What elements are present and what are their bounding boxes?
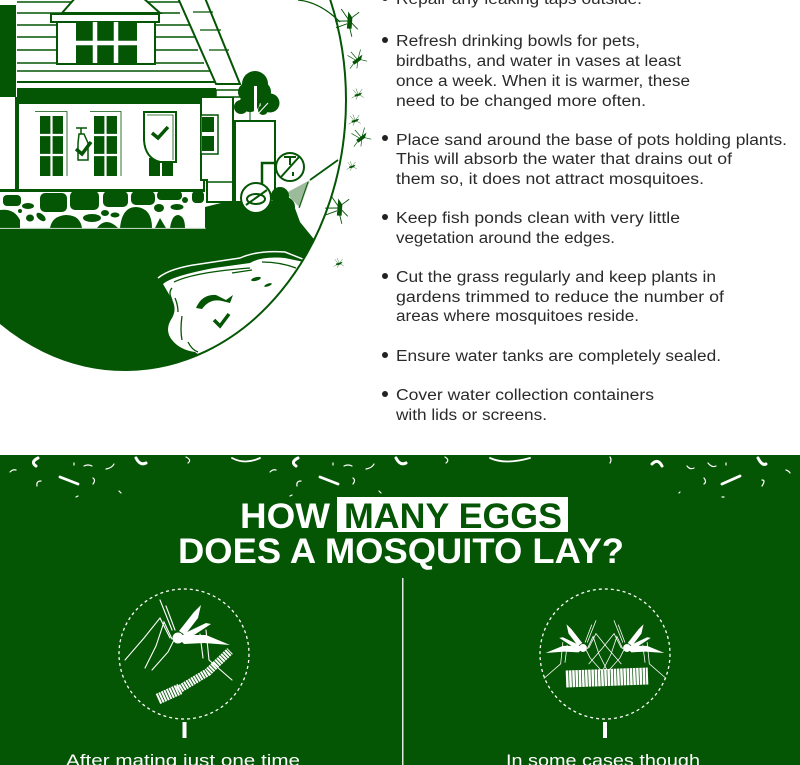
water tank box xyxy=(235,121,275,202)
tree xyxy=(234,71,280,120)
mosquitoes swarm xyxy=(322,6,372,268)
tip: sand xyxy=(382,132,787,188)
tip: fish ponds xyxy=(382,210,680,247)
tip: containers xyxy=(382,387,654,424)
title xyxy=(178,497,624,571)
window with check xyxy=(144,112,176,176)
tip: grass: gardens trimmed to reduce the number of xyxy=(396,289,725,306)
tip: sand: Place sand around the base of pots holding plants. xyxy=(396,132,787,149)
tip: refresh water xyxy=(382,33,690,110)
tip: refresh water: birdbaths, and water in vases at least xyxy=(396,53,682,70)
net xyxy=(286,160,338,208)
tip: refresh water: need to be changed more often. xyxy=(396,93,646,110)
tip: containers: with lids or screens. xyxy=(395,407,547,424)
connector xyxy=(603,722,607,738)
dormer xyxy=(51,0,160,64)
connector xyxy=(182,722,186,738)
tips list xyxy=(382,0,787,424)
tip: grass: areas where mosquitoes reside. xyxy=(396,308,639,325)
title: HOW xyxy=(240,497,330,536)
roof band xyxy=(17,88,216,103)
stone base xyxy=(0,189,205,229)
icon: spray bottle xyxy=(76,128,91,160)
title: DOES A MOSQUITO LAY? xyxy=(178,532,624,571)
tip: refresh water: Refresh drinking bowls for pets, xyxy=(396,33,640,50)
tip: refresh water: once a week. When it is warmer, these xyxy=(396,73,690,90)
tip: sand: them so, it does not attract mosquitoes. xyxy=(396,171,704,188)
window left xyxy=(35,112,67,176)
branch xyxy=(298,0,340,22)
icon: mosquito laying eggs xyxy=(119,589,249,719)
roof siding xyxy=(17,0,240,84)
ground xyxy=(0,197,314,369)
hose pipe xyxy=(260,162,274,184)
tip: fish ponds: Keep fish ponds clean with very little xyxy=(396,210,680,227)
bush xyxy=(271,187,295,208)
icon: two mosquitoes laying eggs xyxy=(540,589,670,719)
title: MANY EGGS xyxy=(344,497,562,536)
icon: check xyxy=(214,314,229,326)
tip: fish ponds: vegetation around the edges. xyxy=(396,230,615,247)
illustration: house in oval xyxy=(0,0,347,371)
left wall block xyxy=(0,5,16,97)
side extension xyxy=(201,90,240,202)
oval outline xyxy=(0,0,346,370)
tip: water tanks: Ensure water tanks are completely sealed. xyxy=(396,348,721,365)
tip: containers: Cover water collection containers xyxy=(396,387,654,404)
divider xyxy=(402,578,404,765)
icon: bowl prohibited xyxy=(241,183,271,213)
tip: grass: Cut the grass regularly and keep plants in xyxy=(396,269,716,286)
icon: fish xyxy=(196,295,233,309)
window middle xyxy=(90,112,121,176)
tip: grass xyxy=(382,269,725,325)
tip: sand: This will absorb the water that drains out of xyxy=(396,151,733,168)
house wall xyxy=(15,97,204,192)
larvae decoration xyxy=(10,457,790,497)
panel: how many eggs xyxy=(0,455,800,765)
pond xyxy=(158,250,303,354)
icon: tap prohibited xyxy=(276,153,304,181)
